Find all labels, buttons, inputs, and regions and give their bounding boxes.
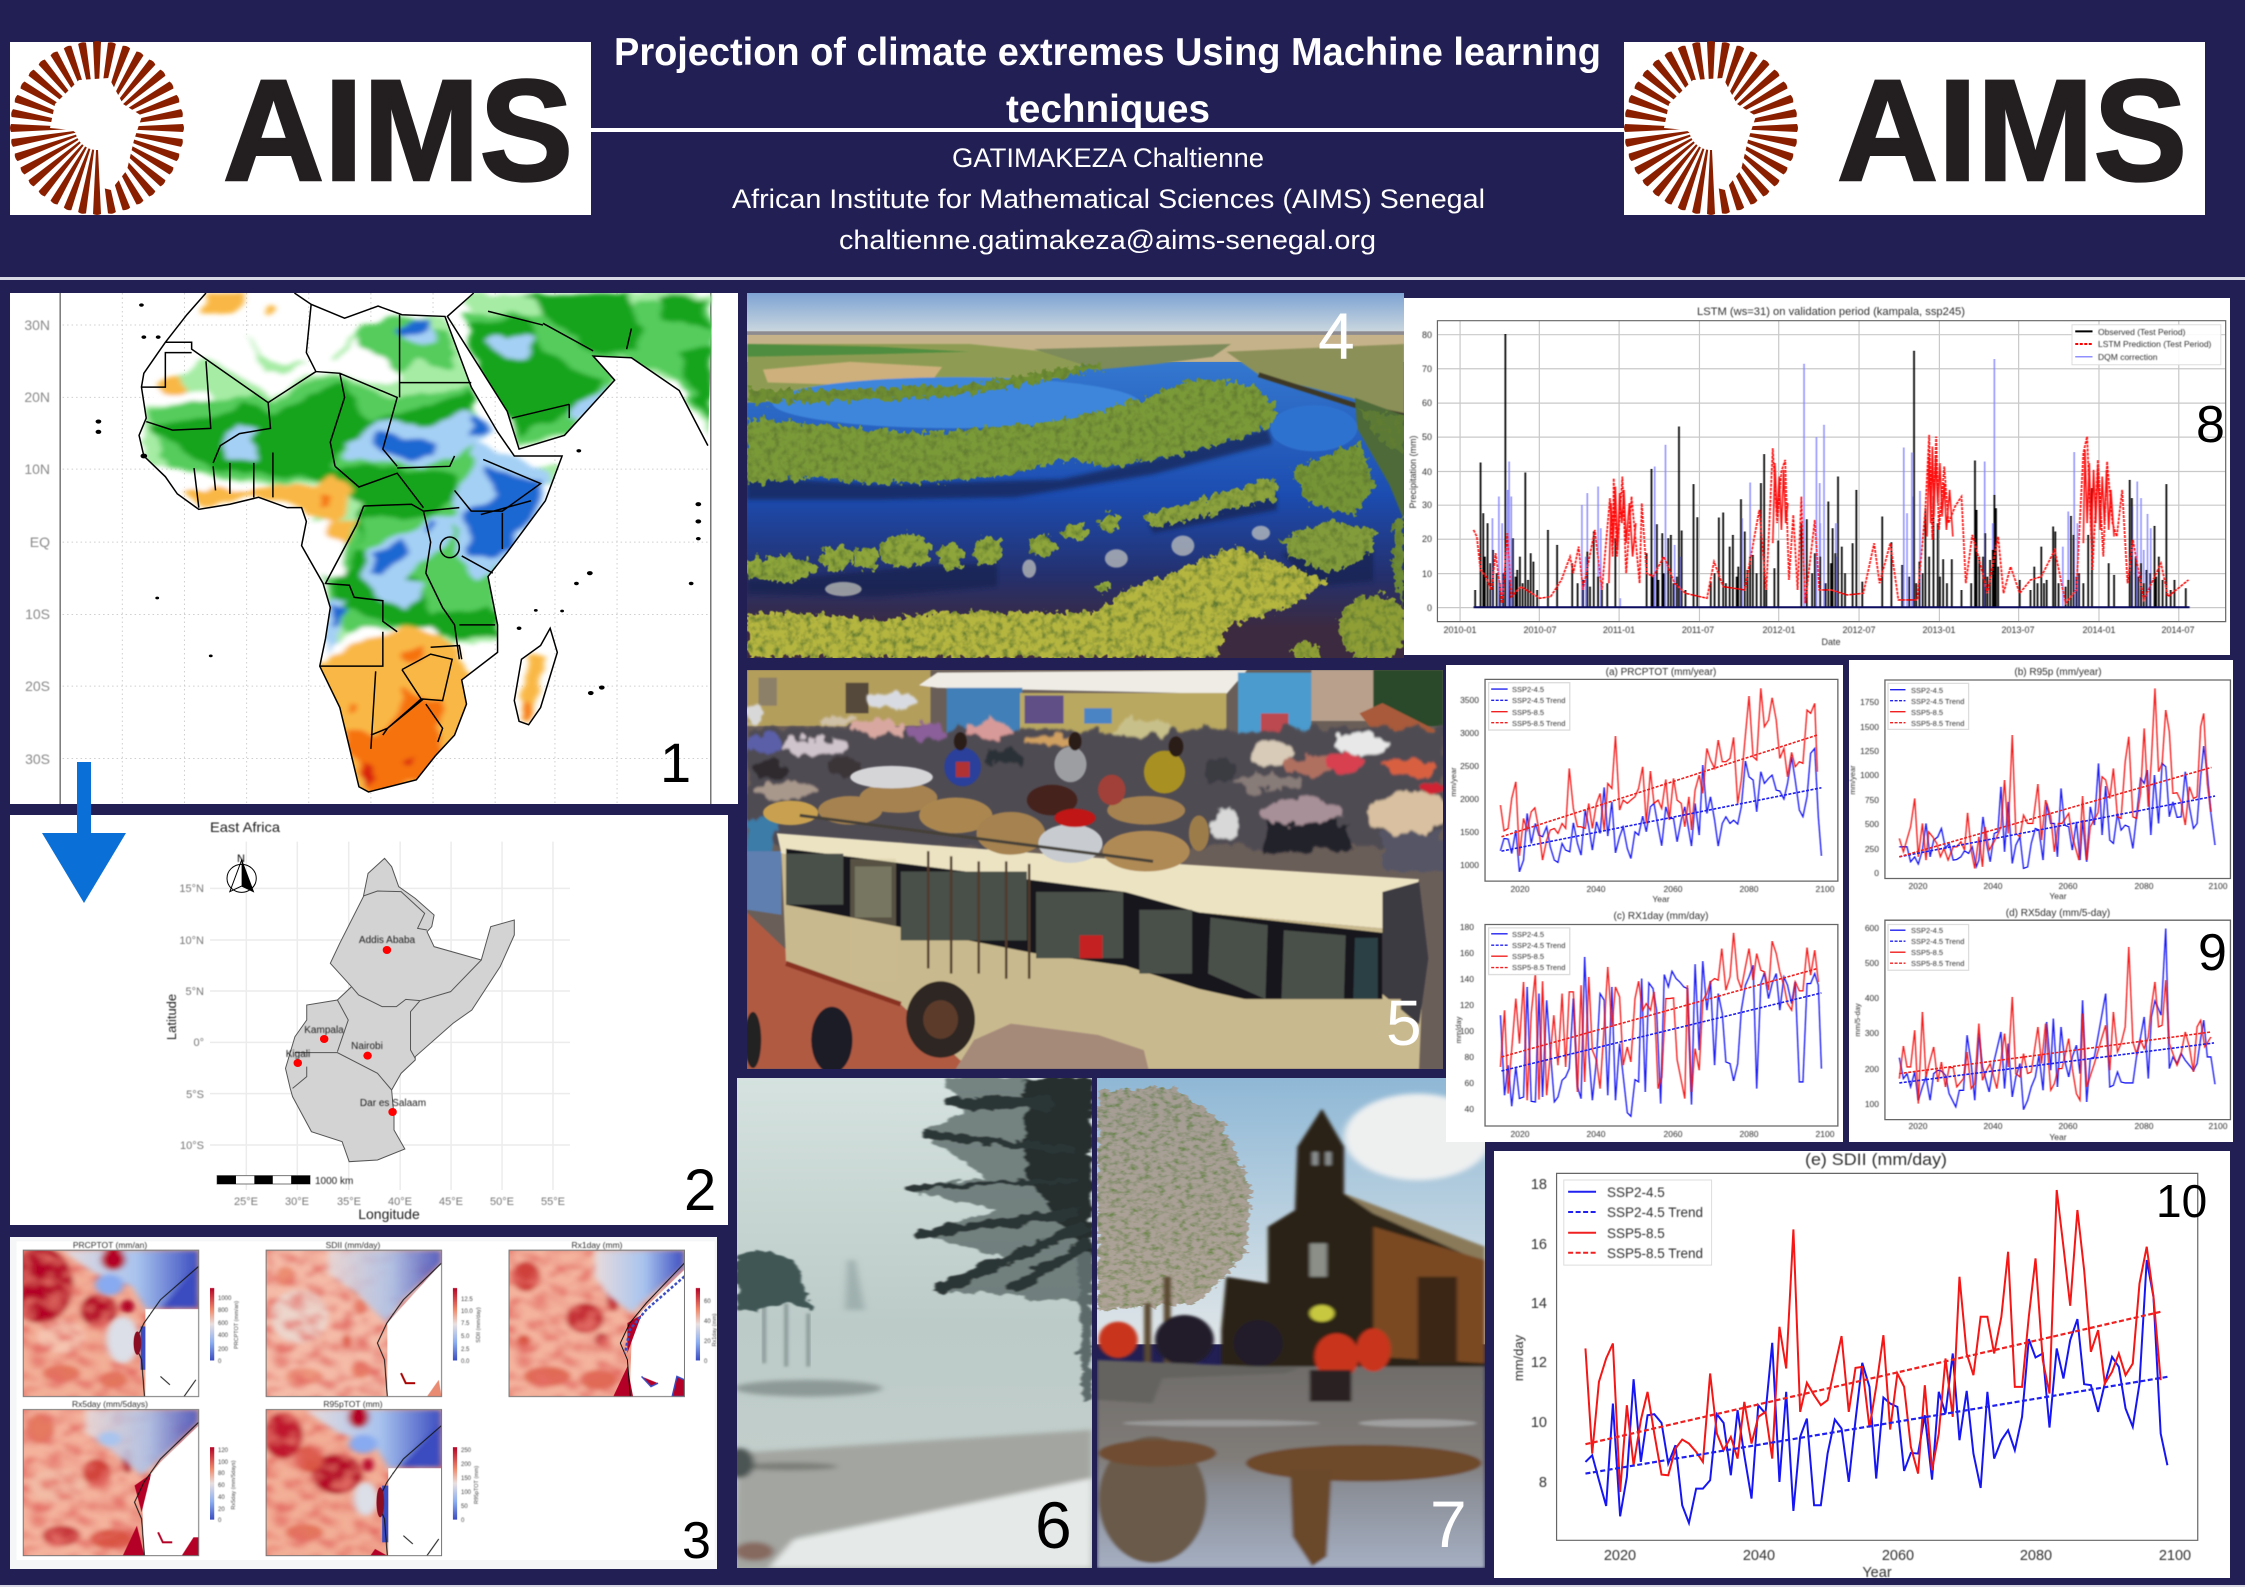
chart labels a and c: 2080: [1740, 884, 1759, 894]
heat map titles and colour-bar labels: PRCPTOT (mm/an): [73, 1240, 147, 1250]
chart labels: 2013-07: [2001, 625, 2035, 635]
heat map titles and colour-bar labels: Rx1day (mm): [571, 1240, 623, 1250]
author and affiliation text: chaltienne.gatimakeza@aims-senegal.org: [839, 225, 1376, 255]
heat map titles and colour-bar labels: 40: [704, 1319, 711, 1325]
chart labels e: (e) SDII (mm/day): [1805, 1150, 1947, 1169]
arrow: blue down arrow from panel 1 to panel 2: [42, 762, 126, 903]
title: [614, 31, 1601, 131]
chart labels a and c: 1000: [1460, 860, 1479, 870]
chart labels e: 12: [1531, 1355, 1547, 1371]
heat map titles and colour-bar labels: 20: [218, 1507, 225, 1513]
heat map titles and colour-bar labels: PRCPTOT (mm/an): [234, 1301, 240, 1349]
heat map titles and colour-bar labels: 100: [218, 1460, 229, 1466]
panel number 9: 9: [2198, 924, 2227, 982]
latitude labels: 10S: [25, 606, 50, 622]
title: Projection of climate extremes Using Machine learning: [614, 31, 1601, 74]
author and affiliation text: [732, 143, 1485, 255]
panel number 7: 7: [1430, 1487, 1467, 1561]
chart labels: 2011-01: [1603, 625, 1635, 635]
chart labels: 2012-07: [1842, 625, 1876, 635]
chart labels b and d: 600: [1865, 923, 1879, 933]
logo: AIMS right: AIMS: [1837, 50, 2187, 211]
chart labels e: 2100: [2159, 1548, 2191, 1564]
heat map titles and colour-bar labels: 400: [218, 1333, 229, 1339]
chart labels b and d: 400: [1865, 993, 1879, 1003]
chart labels b and d: 500: [1865, 819, 1879, 829]
panel 2: East Africa study area map: [10, 815, 728, 1225]
map labels: [164, 819, 565, 1222]
chart labels: 2011-07: [1682, 625, 1714, 635]
chart labels: 2014-01: [2082, 625, 2116, 635]
chart labels a and c: (c) RX1day (mm/day): [1613, 911, 1709, 922]
map labels: 0°: [193, 1037, 204, 1049]
map labels: 30°E: [285, 1196, 309, 1208]
chart labels b and d: 2040: [1984, 1121, 2003, 1131]
heat map titles and colour-bar labels: 0: [218, 1518, 222, 1524]
header band background: [0, 0, 2245, 280]
heat map titles and colour-bar labels: SDII (mm/day): [326, 1240, 381, 1250]
map labels: East Africa: [210, 819, 280, 835]
panel number 8: 8: [2196, 396, 2225, 454]
chart labels e: Year: [1862, 1565, 1892, 1581]
chart labels b and d: 0: [1874, 868, 1879, 878]
chart labels b and d: 2020: [1909, 1121, 1928, 1131]
chart labels a and c: Year: [1652, 894, 1670, 904]
chart labels e: 2020: [1604, 1548, 1636, 1564]
chart labels b and d: 2080: [2135, 881, 2154, 891]
chart labels b and d: (d) RX5day (mm/5-day): [2006, 908, 2110, 919]
heat map titles and colour-bar labels: Rx5day (mm/5days): [72, 1399, 148, 1409]
map labels: Longitude: [358, 1206, 420, 1222]
chart labels a and c: 160: [1460, 948, 1474, 958]
title: techniques: [1006, 88, 1210, 131]
chart labels: 30: [1422, 500, 1432, 510]
heat map titles and colour-bar labels: 80: [218, 1471, 225, 1477]
chart labels e: 8: [1539, 1475, 1547, 1491]
chart labels a and c: SSP2-4.5: [1512, 930, 1544, 939]
heat map titles and colour-bar labels: 0: [218, 1359, 222, 1365]
photo 4: flooded river aerial view: [742, 293, 1408, 661]
chart labels a and c: SSP5-8.5: [1512, 952, 1544, 961]
panel 9 left: PRCPTOT and RX1day projections: [1446, 665, 1843, 1142]
heat map titles and colour-bar labels: SDII (mm/day): [476, 1307, 482, 1343]
chart labels: [1408, 306, 2212, 647]
chart labels a and c: 2040: [1587, 1129, 1606, 1139]
chart labels a and c: 2100: [1816, 884, 1835, 894]
panel number 6: 6: [1035, 1488, 1072, 1562]
heat map titles and colour-bar labels: 0: [461, 1518, 465, 1524]
chart labels b and d: 1750: [1860, 697, 1879, 707]
chart labels e: 10: [1531, 1415, 1547, 1431]
heat map titles and colour-bar labels: R95pTOT (mm): [323, 1399, 383, 1409]
chart a: PRCPTOT lines: [1485, 679, 1838, 881]
chart labels: 10: [1422, 569, 1432, 579]
chart labels e: 2060: [1882, 1548, 1914, 1564]
heat map titles and colour-bar labels: 20: [704, 1339, 711, 1345]
latitude labels: [24, 317, 50, 767]
chart labels a and c: 180: [1460, 922, 1474, 932]
chart labels: 60: [1422, 398, 1432, 408]
map labels: Dar es Salaam: [360, 1098, 426, 1109]
map labels: 10°S: [180, 1140, 204, 1152]
logo: AIMS right: [1624, 41, 2205, 215]
author and affiliation text: GATIMAKEZA Chaltienne: [952, 143, 1264, 173]
heat map titles and colour-bar labels: 10.0: [461, 1309, 473, 1315]
chart labels e: 2040: [1743, 1548, 1775, 1564]
chart labels a and c: 2060: [1664, 1129, 1683, 1139]
chart labels b and d: 2040: [1984, 881, 2003, 891]
latitude labels: 30S: [25, 751, 50, 767]
chart labels a and c: 2100: [1816, 1129, 1835, 1139]
heat map titles and colour-bar labels: 40: [218, 1495, 225, 1501]
chart labels b and d: 2060: [2059, 881, 2078, 891]
chart labels b and d: 1000: [1860, 770, 1879, 780]
map labels: 1000 km: [315, 1176, 353, 1187]
chart labels: 0: [1427, 603, 1432, 613]
panel number 2: 2: [684, 1158, 716, 1223]
map labels: Kigali: [286, 1049, 310, 1060]
chart labels a and c: mm/year: [1449, 767, 1458, 797]
chart labels: 2013-01: [1922, 625, 1956, 635]
chart labels b and d: 2080: [2135, 1121, 2154, 1131]
heat map titles and colour-bar labels: 800: [218, 1308, 229, 1314]
chart labels b and d: mm/5-day: [1853, 1003, 1862, 1037]
chart labels a and c: 2040: [1587, 884, 1606, 894]
chart labels e: 16: [1531, 1237, 1547, 1253]
chart labels: 50: [1422, 432, 1432, 442]
chart labels b and d: SSP2-4.5 Trend: [1911, 937, 1964, 946]
photo 7: flood rescue in front of church: [1097, 1078, 1491, 1568]
chart labels: 40: [1422, 467, 1432, 477]
heat map titles and colour-bar labels: 60: [704, 1299, 711, 1305]
map labels: 5°S: [186, 1089, 204, 1101]
heat map titles and colour-bar labels: 12.5: [461, 1297, 473, 1303]
panel 3: five extreme-index heat maps: [7, 1237, 718, 1570]
heat map titles and colour-bar labels: 50: [461, 1504, 468, 1510]
chart labels: LSTM Prediction (Test Period): [2098, 339, 2212, 349]
chart labels b and d: 1250: [1860, 746, 1879, 756]
chart labels: 2014-07: [2161, 625, 2195, 635]
chart labels a and c: 2500: [1460, 761, 1479, 771]
chart labels a and c: 60: [1465, 1078, 1474, 1088]
chart labels a and c: SSP5-8.5: [1512, 708, 1544, 717]
chart labels: 2012-01: [1762, 625, 1796, 635]
heat map titles and colour-bar labels: 2.5: [461, 1347, 470, 1353]
chart labels a and c: SSP5-8.5 Trend: [1512, 719, 1565, 728]
chart labels a and c: 40: [1465, 1104, 1474, 1114]
heat map titles and colour-bar labels: 60: [218, 1483, 225, 1489]
chart labels: 20: [1422, 534, 1432, 544]
heat map titles and colour-bar labels: 0.0: [461, 1359, 470, 1365]
chart labels a and c: 2080: [1740, 1129, 1759, 1139]
chart labels b and d: SSP2-4.5 Trend: [1911, 697, 1964, 706]
latitude labels: 20S: [25, 678, 50, 694]
chart labels: Observed (Test Period): [2098, 327, 2186, 337]
chart labels b and d: 250: [1865, 844, 1879, 854]
chart labels: 2010-07: [1523, 625, 1557, 635]
chart labels b and d: SSP5-8.5 Trend: [1911, 719, 1964, 728]
heat map titles and colour-bar labels: 5.0: [461, 1334, 470, 1340]
chart labels a and c: 80: [1465, 1052, 1474, 1062]
panel number 5: 5: [1386, 987, 1422, 1059]
chart labels e: 2080: [2020, 1548, 2052, 1564]
chart labels a and c: 3000: [1460, 728, 1479, 738]
chart labels b and d: SSP5-8.5 Trend: [1911, 959, 1964, 968]
chart labels: 70: [1422, 364, 1432, 374]
map labels: 35°E: [337, 1196, 361, 1208]
heat map titles and colour-bar labels: Rx5day (mm/5days): [231, 1460, 237, 1510]
map labels: Nairobi: [351, 1041, 383, 1052]
chart labels b and d: 750: [1865, 795, 1879, 805]
panel number 1: 1: [660, 731, 691, 794]
chart labels e: 14: [1531, 1296, 1547, 1312]
chart labels: Date: [1821, 637, 1841, 647]
chart labels b and d: Year: [2049, 1132, 2067, 1142]
logo: AIMS left: AIMS: [223, 50, 573, 211]
chart labels a and c: SSP2-4.5 Trend: [1512, 941, 1565, 950]
chart labels b and d: SSP5-8.5: [1911, 708, 1943, 717]
chart labels b and d: mm/year: [1848, 765, 1857, 795]
heat map titles and colour-bar labels: 7.5: [461, 1321, 470, 1327]
chart labels e: SSP2-4.5: [1607, 1185, 1665, 1200]
chart labels: Precipitation (mm): [1408, 435, 1418, 509]
chart labels e: SSP2-4.5 Trend: [1607, 1205, 1703, 1220]
chart labels b and d: 2020: [1909, 881, 1928, 891]
chart labels: 2010-01: [1443, 625, 1477, 635]
chart labels: 80: [1422, 330, 1432, 340]
chart labels a and c: 2060: [1664, 884, 1683, 894]
chart labels: DQM correction: [2098, 352, 2158, 362]
panel number 4: 4: [1318, 299, 1355, 373]
heat map titles and colour-bar labels: 200: [218, 1347, 229, 1353]
chart labels b and d: 200: [1865, 1064, 1879, 1074]
chart labels b and d: [1848, 667, 2228, 1142]
heat map titles and colour-bar labels: 150: [461, 1476, 472, 1482]
chart labels b and d: 300: [1865, 1028, 1879, 1038]
chart labels e: 18: [1531, 1177, 1547, 1193]
heat map titles and colour-bar labels: R95pTOT (mm): [474, 1466, 480, 1504]
map labels: Kampala: [304, 1025, 344, 1036]
heat map titles and colour-bar labels: 120: [218, 1448, 229, 1454]
panel 8: LSTM validation time series chart: [1404, 298, 2230, 655]
latitude labels: 10N: [24, 461, 50, 477]
map labels: Addis Ababa: [359, 935, 416, 946]
photo 5: overloaded bus in market: [745, 670, 1447, 1073]
chart labels b and d: 500: [1865, 958, 1879, 968]
chart labels a and c: 2020: [1511, 1129, 1530, 1139]
map labels: 50°E: [490, 1196, 514, 1208]
chart labels b and d: 100: [1865, 1099, 1879, 1109]
panel 1: Africa rainfall anomaly map: [10, 293, 738, 804]
map labels: Latitude: [164, 994, 179, 1040]
photo 6: tropical storm with palm trees: [725, 1078, 1092, 1568]
chart labels a and c: 2020: [1511, 884, 1530, 894]
latitude labels: 30N: [24, 317, 50, 333]
chart c: RX1day lines: [1485, 925, 1838, 1126]
chart labels: LSTM (ws=31) on validation period (kampala, ssp245): [1697, 306, 1965, 318]
map labels: 15°N: [179, 883, 204, 895]
chart b: R95p lines: [1885, 680, 2230, 878]
heat map titles and colour-bar labels: 200: [461, 1462, 472, 1468]
heat map titles and colour-bar labels: 600: [218, 1321, 229, 1327]
chart labels b and d: SSP5-8.5: [1911, 948, 1943, 957]
map labels: 5°N: [186, 986, 204, 998]
author and affiliation text: African Institute for Mathematical Sciences (AIMS) Senegal: [732, 184, 1485, 214]
chart labels a and c: 3500: [1460, 695, 1479, 705]
chart labels a and c: mm/day: [1454, 1016, 1463, 1043]
panel number 10: 10: [2156, 1175, 2207, 1227]
chart labels e: SSP5-8.5: [1607, 1226, 1665, 1241]
chart labels a and c: 100: [1460, 1026, 1474, 1036]
chart labels b and d: 2060: [2059, 1121, 2078, 1131]
latitude labels: EQ: [30, 534, 50, 550]
chart labels a and c: [1449, 667, 1835, 1139]
chart labels b and d: (b) R95p (mm/year): [2014, 667, 2102, 678]
map labels: 55°E: [541, 1196, 565, 1208]
chart labels a and c: (a) PRCPTOT (mm/year): [1606, 667, 1716, 678]
logo: AIMS left: [10, 41, 591, 215]
chart labels b and d: Year: [2049, 891, 2067, 901]
panel 10: SDII projection chart: [1494, 1150, 2230, 1581]
chart labels e: [1511, 1150, 2191, 1581]
chart labels a and c: SSP5-8.5 Trend: [1512, 963, 1565, 972]
map labels: 40°E: [388, 1196, 412, 1208]
heat map titles and colour-bar labels: 0: [704, 1359, 708, 1365]
chart d: RX5day lines: [1885, 920, 2230, 1120]
heat map titles and colour-bar labels: 1000: [218, 1296, 232, 1302]
chart labels a and c: SSP2-4.5 Trend: [1512, 696, 1565, 705]
chart labels b and d: SSP2-4.5: [1911, 686, 1943, 695]
chart labels a and c: 1500: [1460, 827, 1479, 837]
map labels: 45°E: [439, 1196, 463, 1208]
chart labels b and d: 1500: [1860, 722, 1879, 732]
map labels: 25°E: [234, 1196, 258, 1208]
chart labels e: mm/day: [1511, 1334, 1526, 1381]
map labels: N: [237, 853, 245, 865]
heat map titles and colour-bar labels: 250: [461, 1448, 472, 1454]
map labels: 10°N: [179, 935, 204, 947]
chart labels b and d: SSP2-4.5: [1911, 926, 1943, 935]
chart labels b and d: 2100: [2209, 881, 2228, 891]
chart labels a and c: 120: [1460, 1000, 1474, 1010]
chart labels b and d: 2100: [2209, 1121, 2228, 1131]
heat map titles and colour-bar labels: [72, 1240, 718, 1524]
latitude labels: 20N: [24, 389, 50, 405]
chart labels a and c: 140: [1460, 974, 1474, 984]
heat map titles and colour-bar labels: 100: [461, 1490, 472, 1496]
chart labels e: SSP5-8.5 Trend: [1607, 1246, 1703, 1261]
panel number 3: 3: [682, 1512, 711, 1570]
chart labels a and c: 2000: [1460, 794, 1479, 804]
heat map titles and colour-bar labels: Rx1day (mm): [712, 1313, 718, 1347]
chart labels a and c: SSP2-4.5: [1512, 685, 1544, 694]
panel 9 right: R95p and RX5day projections: [1848, 660, 2233, 1142]
